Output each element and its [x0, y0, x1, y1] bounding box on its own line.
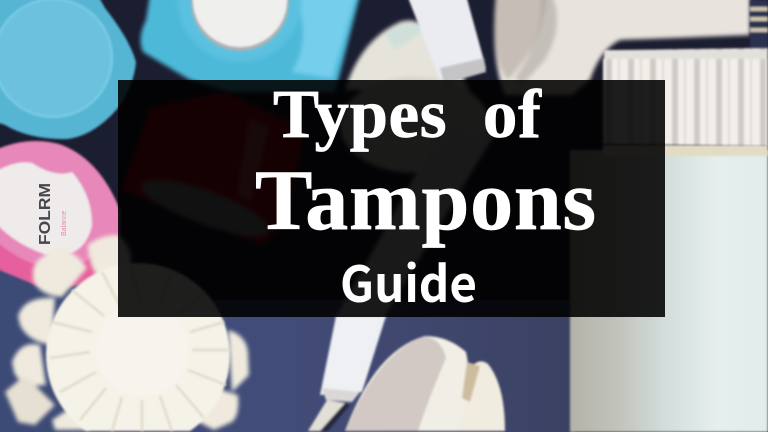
beige macaron-shaped tampon tips: [345, 336, 505, 431]
white cap centre: [191, 0, 289, 51]
flower disc: [46, 263, 230, 431]
heading: Tampons: Tampons: [255, 152, 596, 248]
white applicator tube, top centre: [407, 0, 486, 84]
white flower-shaped applicator base: [5, 235, 249, 431]
title text group: [255, 80, 596, 317]
white object beside blue cap: [340, 20, 490, 173]
white applicator stick, lower centre: [308, 316, 386, 431]
ribbed jar lid: [603, 48, 768, 146]
applicator stick ghost under overlay: [336, 120, 494, 317]
flower centre: [96, 304, 188, 396]
striped item, top right corner: [750, 0, 768, 48]
flower ruffles: [50, 266, 230, 431]
blue cap, left: [0, 0, 136, 139]
title panel: [118, 80, 665, 317]
blue square cap with white centre: [141, 0, 360, 92]
brand label on pink cap: Balance: [61, 211, 68, 236]
dark red cap, dimmed under the overlay: [122, 92, 305, 246]
jar shoulder band: [603, 145, 768, 156]
white cone, top centre: [494, 0, 750, 95]
subheading: Guide: Guide: [340, 245, 477, 317]
navy table surface, lower area: [0, 270, 575, 432]
pink cap with label: [0, 141, 120, 288]
flower petals: [5, 235, 249, 430]
brand label on pink cap: FOLRM: [37, 183, 54, 245]
brand label on pink cap: [37, 183, 68, 245]
jar body: [570, 150, 768, 432]
